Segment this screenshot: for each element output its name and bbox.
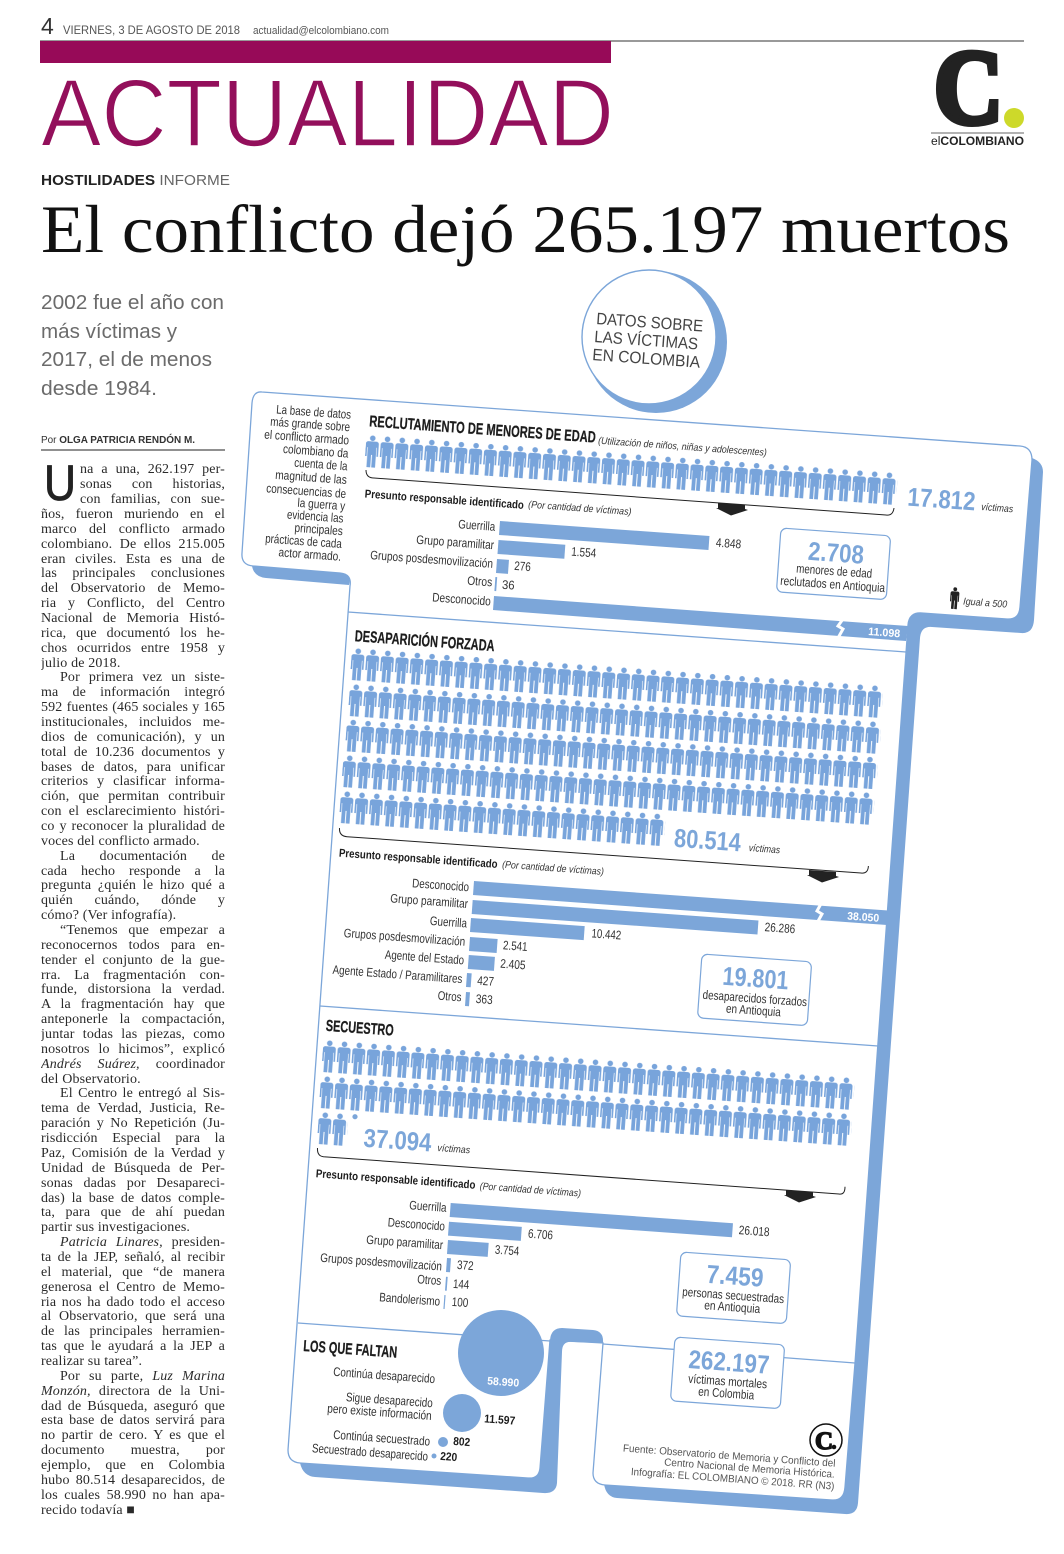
- panel: reclutamiento de menores: [364, 413, 1013, 641]
- callout: 2.708: menores de edad: [796, 562, 873, 581]
- intro text block: consecuencias de: [266, 481, 347, 501]
- logo: El Colombiano: elCOLOMBIANO: [931, 136, 1024, 148]
- bubble chart: 220: [440, 1451, 458, 1464]
- logo: El Colombiano: C: [934, 29, 1003, 146]
- callout: 262.197: 262.197: [688, 1344, 771, 1380]
- bar chart: Grupo paramilitar: [416, 533, 495, 552]
- lede: más víctimas y: [41, 320, 178, 343]
- intro text block: magnitud de las: [275, 468, 347, 487]
- bar chart: [370, 517, 908, 641]
- source note: Infografía: EL COLOMBIANO © 2018. RR (N3): [630, 1466, 835, 1493]
- bar chart: 427: [477, 974, 494, 989]
- bar chart: 4.848: [715, 536, 742, 551]
- page header: folio and date: VIERNES, 3 DE AGOSTO DE 2018: [63, 23, 240, 37]
- source note: Fuente: Observatorio de Memoria y Conflicto del: [622, 1443, 836, 1470]
- bar chart: Grupos posdesmovilización: [320, 1251, 443, 1274]
- callout: 2.708: [776, 528, 891, 600]
- panel: los que faltan: [303, 1310, 544, 1464]
- intro text block: cuenta de la: [294, 456, 348, 473]
- lede: 2002 fue el año con: [41, 291, 224, 314]
- bubble chart: pero existe información: [327, 1402, 432, 1423]
- bar chart: 36: [501, 578, 515, 593]
- bar chart: Otros: [437, 989, 462, 1004]
- arrow: [807, 870, 839, 882]
- callout: 7.459: personas secuestradas: [682, 1285, 785, 1306]
- callout: 262.197: víctimas mortales: [688, 1372, 768, 1391]
- lede: [41, 291, 224, 400]
- section dividers: [298, 612, 906, 1363]
- bubble chart: [311, 1310, 544, 1464]
- bubble chart: Continúa secuestrado: [333, 1428, 431, 1449]
- bar chart: 276: [514, 559, 531, 574]
- bar chart: 363: [475, 992, 493, 1007]
- heading: RECLUTAMIENTO DE MENORES DE EDAD: [369, 413, 596, 447]
- article body: [41, 463, 225, 1518]
- circle: datos sobre las víctimas: [582, 270, 727, 413]
- headline: El conflicto dejó 265.197 muertos: [41, 191, 1010, 267]
- bubble chart: Continúa desaparecido: [333, 1365, 436, 1386]
- heading: SECUESTRO: [325, 1018, 394, 1040]
- bar chart: [332, 876, 888, 1007]
- bar chart: Grupo paramilitar: [390, 891, 469, 911]
- responsible heading: (Por cantidad de víctimas): [479, 1181, 581, 1200]
- circle: datos sobre las víctimas: DATOS SOBRE: [596, 310, 704, 336]
- bracket: [317, 1148, 845, 1194]
- bar chart: 2.405: [500, 957, 526, 972]
- bar chart: Guerrilla: [458, 517, 496, 534]
- white panel outline: [242, 392, 1032, 1500]
- arrow: [716, 503, 748, 516]
- bar chart: Desconocido: [387, 1215, 445, 1233]
- circle: datos sobre las víctimas: LAS VÍCTIMAS: [594, 327, 699, 353]
- bar chart: 144: [452, 1277, 470, 1292]
- callout: 19.801: [697, 954, 812, 1026]
- unit: víctimas: [981, 502, 1013, 515]
- bar chart: 6.706: [528, 1227, 553, 1242]
- callout: 19.801: 19.801: [722, 961, 790, 995]
- shadow under top-left panel: [252, 566, 350, 585]
- responsible heading: [315, 1168, 581, 1200]
- bar chart: 26.018: [738, 1223, 770, 1239]
- lede: desde 1984.: [41, 377, 157, 400]
- bar chart: 38.050: [847, 911, 880, 925]
- bracket: [339, 828, 868, 873]
- page header: folio and date: 4: [41, 13, 54, 39]
- bar chart: Otros: [467, 574, 493, 589]
- intro text block: colombiano da: [282, 442, 349, 461]
- bubble chart: Secuestrado desaparecido: [311, 1441, 429, 1464]
- intro text block: la guerra y: [297, 496, 346, 513]
- intro text block: prácticas de cada: [265, 532, 342, 551]
- bar chart: 26.286: [764, 920, 796, 936]
- pictogram rows: [339, 648, 883, 847]
- bar chart: Grupos posdesmovilización: [343, 926, 466, 949]
- callout: 19.801: desaparecidos forzados: [702, 988, 808, 1009]
- bubble chart: 11.597: [484, 1413, 516, 1428]
- icon: small logo: C: [815, 1428, 833, 1455]
- bar chart: 1.554: [571, 545, 597, 560]
- heading: DESAPARICIÓN FORZADA: [354, 626, 496, 655]
- bubble chart: 58.990: [487, 1375, 520, 1390]
- bar chart: 100: [451, 1295, 469, 1310]
- shadow band right side: [604, 458, 1043, 1514]
- bar chart: 2.541: [503, 938, 528, 954]
- callout: 2.708: 2.708: [807, 536, 865, 570]
- arrow: [784, 1190, 816, 1202]
- bar chart: Guerrilla: [429, 914, 468, 931]
- bubble chart: 802: [453, 1436, 471, 1449]
- callout: 7.459: 7.459: [706, 1259, 765, 1293]
- intro text block: el conflicto armado: [264, 428, 350, 448]
- legend: igual a 500: Igual a 500: [963, 597, 1008, 611]
- unit: víctimas: [748, 843, 780, 856]
- bar chart: [320, 1198, 770, 1310]
- page header: folio and date: [40, 13, 1024, 41]
- panel: secuestro: [315, 1018, 855, 1324]
- unit: víctimas: [437, 1143, 470, 1156]
- infographic: conflict victims: [242, 270, 1043, 1514]
- pictogram row: [364, 435, 898, 506]
- callout: 7.459: [676, 1252, 791, 1324]
- bar chart: Grupos posdesmovilización: [370, 548, 494, 571]
- icon: small logo: [810, 1424, 842, 1456]
- intro text block: La base de datos: [276, 403, 352, 422]
- bar chart: Guerrilla: [409, 1198, 447, 1215]
- section title: ACTUALIDAD: [41, 60, 614, 167]
- total: 80.514: [673, 823, 742, 857]
- bar chart: 10.442: [591, 926, 622, 943]
- bar chart: Otros: [417, 1272, 442, 1288]
- bar chart: Agente del Estado: [384, 948, 465, 967]
- subheading: (Utilización de niños, niñas y adolescentes): [598, 436, 767, 459]
- bar chart: 372: [456, 1258, 474, 1273]
- bar chart: Desconocido: [432, 590, 491, 609]
- responsible heading: Presunto responsable identificado: [315, 1168, 476, 1192]
- section bar: [40, 41, 611, 63]
- intro text block: actor armado.: [278, 545, 342, 564]
- callout: 262.197: [670, 1337, 785, 1409]
- intro text block: principales: [294, 521, 343, 538]
- callout: 262.197: en Colombia: [698, 1385, 755, 1402]
- bar chart: Bandolerismo: [379, 1290, 441, 1309]
- total: 17.812: [907, 482, 977, 516]
- responsible heading: Presunto responsable identificado: [364, 489, 524, 512]
- responsible heading: [338, 848, 604, 878]
- bar chart: 3.754: [494, 1243, 520, 1258]
- bubble chart: Sigue desaparecido: [345, 1390, 433, 1410]
- bar chart: Agente Estado / Paramilitares: [332, 963, 463, 986]
- responsible heading: Presunto responsable identificado: [338, 848, 498, 871]
- intro text block: [264, 403, 352, 564]
- intro text block: más grande sobre: [270, 415, 351, 434]
- arch band and bottom left shadow: [300, 1328, 603, 1493]
- panel: desaparición forzada: [332, 626, 888, 1026]
- legend: igual a 500: [949, 587, 1008, 611]
- byline: Por OLGA PATRICIA RENDÓN M.: [41, 433, 195, 446]
- callout: 2.708: reclutados en Antioquia: [780, 574, 886, 595]
- pictogram rows: [317, 1040, 855, 1147]
- total: 37.094: [363, 1123, 433, 1157]
- responsible heading: (Por cantidad de víctimas): [528, 500, 632, 518]
- intro text block: evidencia las: [286, 508, 344, 526]
- responsible heading: (Por cantidad de víctimas): [502, 860, 604, 878]
- kicker: HOSTILIDADES INFORME: [41, 173, 230, 189]
- bar chart: Grupo paramilitar: [366, 1233, 444, 1252]
- lede: 2017, el de menos: [41, 348, 212, 371]
- responsible heading: [364, 489, 632, 518]
- bar chart: 11.098: [868, 626, 901, 640]
- source note: Centro Nacional de Memoria Histórica.: [664, 1457, 835, 1481]
- page header: folio and date: actualidad@elcolombiano.com: [253, 25, 389, 37]
- bracket: [366, 470, 894, 515]
- callout: 7.459: en Antioquia: [704, 1298, 761, 1316]
- heading: LOS QUE FALTAN: [303, 1338, 398, 1362]
- circle: datos sobre las víctimas: EN COLOMBIA: [592, 346, 701, 372]
- callout: 19.801: en Antioquia: [725, 1002, 781, 1019]
- bar chart: Desconocido: [412, 876, 470, 894]
- drop cap: U: [44, 455, 76, 511]
- source note: [622, 1443, 836, 1493]
